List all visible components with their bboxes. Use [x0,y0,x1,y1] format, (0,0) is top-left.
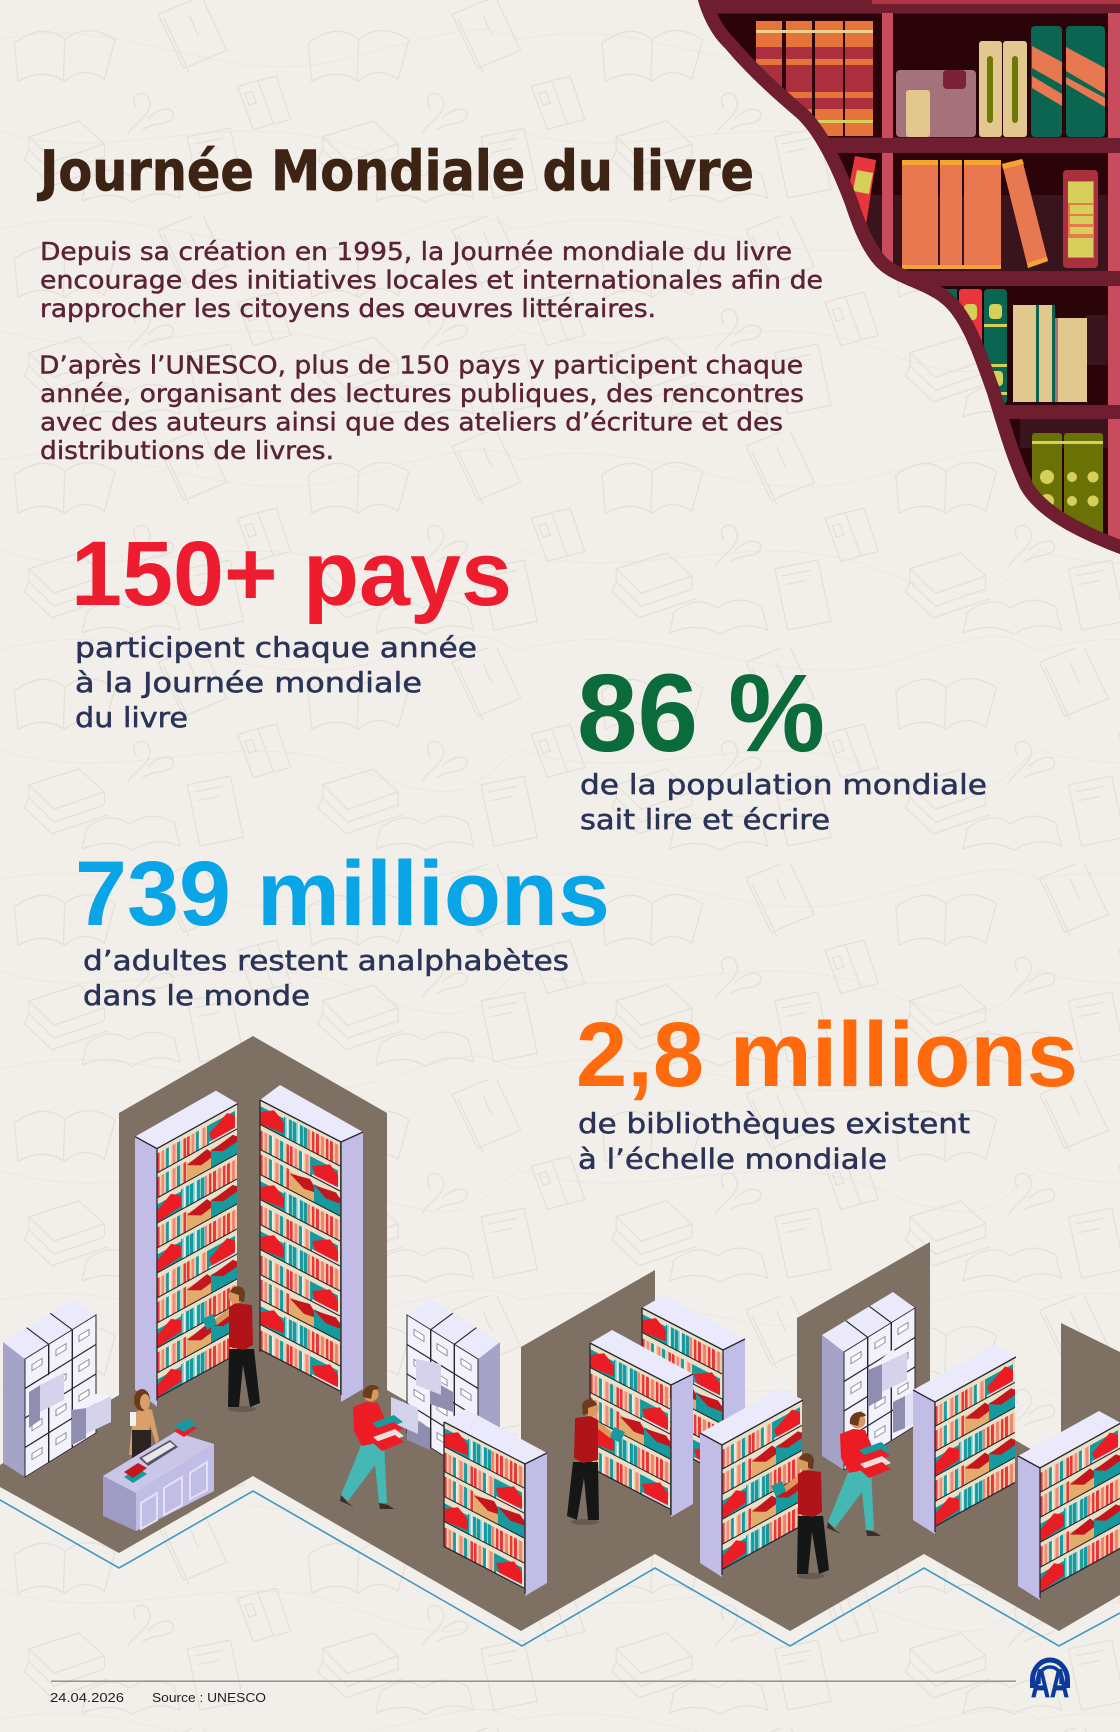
bookshelf centre left [444,1409,547,1596]
bookshelf front centre [590,1330,693,1517]
text block: introduction: encourage des initiatives locales et internationales afin de [40,266,823,294]
books: orange row [902,159,1048,269]
person: librarian [129,1389,159,1460]
text block: introduction: D’après l’UNESCO, plus de 150 pays y participent chaque [39,350,803,380]
stat: 739 millions: d’adultes restent analphabètes [83,944,569,977]
bookshelf right [913,1345,1016,1534]
filing cabinet left [3,1299,111,1477]
date: 24.04.2026 [50,1690,124,1705]
bookshelf far right [1018,1411,1120,1600]
stat: 150+ pays [71,523,512,734]
stat: 739 millions: dans le monde [83,979,310,1012]
stat: 739 millions [75,843,610,1012]
logo: Anadolu Agency [1031,1660,1069,1706]
books: tilted red book [845,156,876,224]
text block: introduction: année, organisant des lectures publiques, des rencontres [40,379,804,408]
reception desk with books [103,1419,214,1531]
books: green pair [1031,26,1105,137]
stat: 86 %: de la population mondiale [580,768,987,801]
illustration: isometric library [0,1036,1120,1646]
books: cream pair [979,41,1027,137]
stat: 86 % [577,652,987,836]
person: man reading at shelf [567,1399,625,1525]
stat: 150+ pays: 150+ pays [71,523,512,625]
text block: introduction: distributions de livres. [40,436,334,465]
text block: introduction: Depuis sa création en 1995, la Journée mondiale du livre [40,237,792,266]
stat: 2,8 millions [576,1004,1078,1176]
stat: 2,8 millions: 2,8 millions [576,1004,1078,1106]
text block: introduction: avec des auteurs ainsi que des ateliers d’écriture et des [40,408,783,436]
books: mauve box [896,70,976,137]
logo: Anadolu Agency: AA [1031,1662,1069,1706]
books: olive pair [1032,433,1103,536]
title: Journée Mondiale du livre [36,139,754,203]
stat: 150+ pays: du livre [75,701,188,734]
stat: 86 %: sait lire et écrire [580,803,830,836]
library floor and walls [0,1036,1120,1631]
books: red book with yellow blocks [1063,170,1098,268]
stat: 739 millions: 739 millions [75,843,610,945]
filing cabinet centre [391,1299,500,1477]
bookshelf middle facing left [700,1388,803,1577]
books: top row red and orange [756,21,873,136]
footer [50,1660,1069,1706]
tall bookshelf right [260,1085,363,1402]
filing cabinet right [822,1292,915,1470]
stat: 150+ pays: à la Journée mondiale [75,666,422,699]
person: man carrying books [340,1385,404,1509]
source: Source : UNESCO [152,1690,266,1705]
tall bookshelf left [135,1091,238,1407]
illustration: bookshelf corner [690,0,1120,560]
person: man picking a book [771,1453,829,1579]
person: man reaching for a book [202,1286,260,1412]
text block: introduction: rapprocher les citoyens des œuvres littéraires. [40,294,656,323]
stat: 2,8 millions: de bibliothèques existent [578,1107,970,1140]
shelves and uprights [690,0,1120,541]
stat: 2,8 millions: à l’échelle mondiale [578,1142,887,1176]
stat: 86 %: 86 % [577,652,825,775]
bookshelf back [642,1295,745,1482]
books: third row green, red and cream [928,289,1087,404]
blue floor outline [0,1491,1120,1646]
text block: introduction [39,237,823,465]
person: man walking with books [827,1412,891,1536]
stat: 150+ pays: participent chaque année [75,631,477,664]
